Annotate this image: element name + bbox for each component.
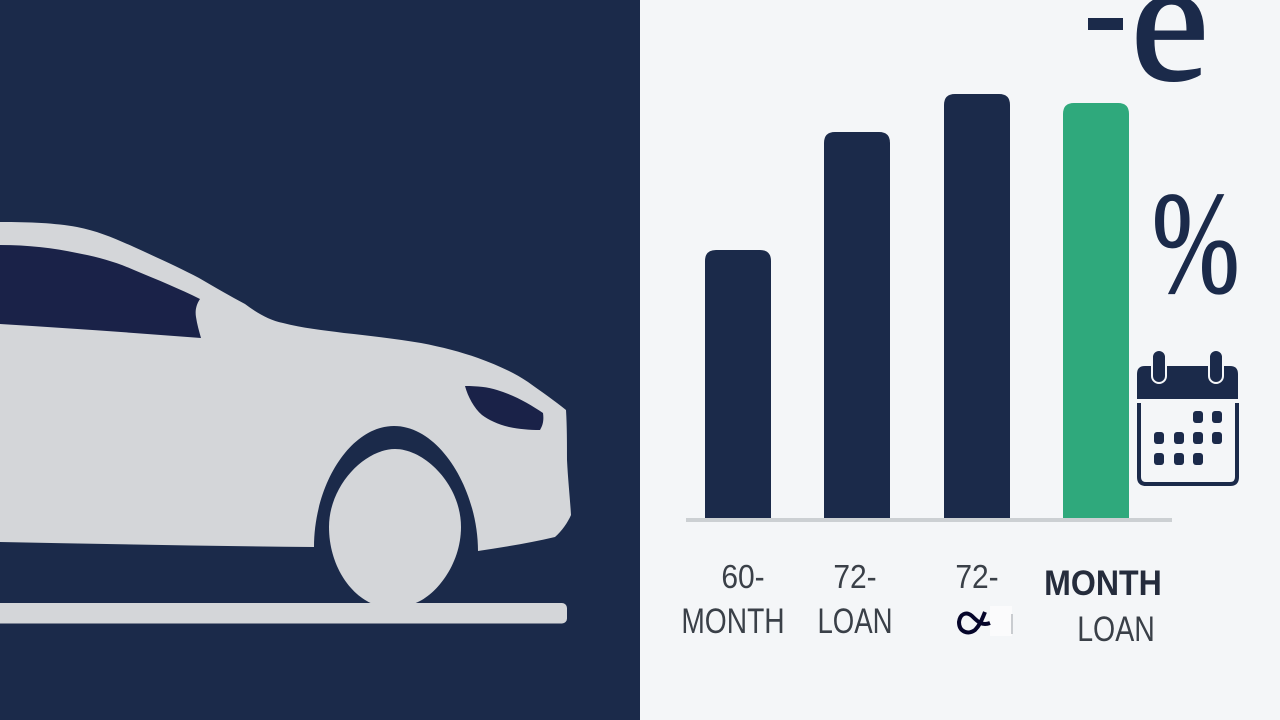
bar: 60-month loan — [705, 250, 771, 518]
label: month loan highlighted: LOAN — [1077, 609, 1155, 649]
heading: cropped headline fragment — [1088, 0, 1209, 117]
bar: highlighted month loan — [1063, 103, 1129, 518]
icon: percent sign: % — [1152, 162, 1240, 324]
icon: calendar — [1137, 350, 1238, 484]
icon: front wheel — [329, 449, 461, 604]
label: month loan highlighted: MONTH — [1044, 565, 1162, 603]
icon: car body silhouette — [0, 222, 571, 551]
panel: navy car panel — [0, 0, 640, 720]
bar chart — [686, 94, 1172, 522]
label: 60-month: MONTH — [681, 601, 785, 641]
icon: car side window — [0, 245, 201, 338]
label: 72-loan: LOAN — [817, 602, 893, 641]
chart axis — [686, 518, 1172, 522]
axis labels — [681, 557, 1162, 649]
label: 60-month — [681, 557, 785, 641]
bar: 72-month loan — [824, 132, 890, 518]
label: month loan highlighted — [1044, 565, 1162, 649]
panel: chart background — [640, 0, 1280, 720]
label: 60-month: 60- — [721, 557, 765, 595]
label: 72-loan: 72- — [833, 557, 877, 595]
icon: car headlight — [465, 386, 543, 430]
label: 72-loan — [817, 557, 893, 641]
label: 72-garbled: 72- — [955, 557, 999, 595]
label: 72-garbled — [955, 557, 1013, 636]
icon: road line — [0, 603, 567, 624]
bar: second 72-month loan — [944, 94, 1010, 518]
